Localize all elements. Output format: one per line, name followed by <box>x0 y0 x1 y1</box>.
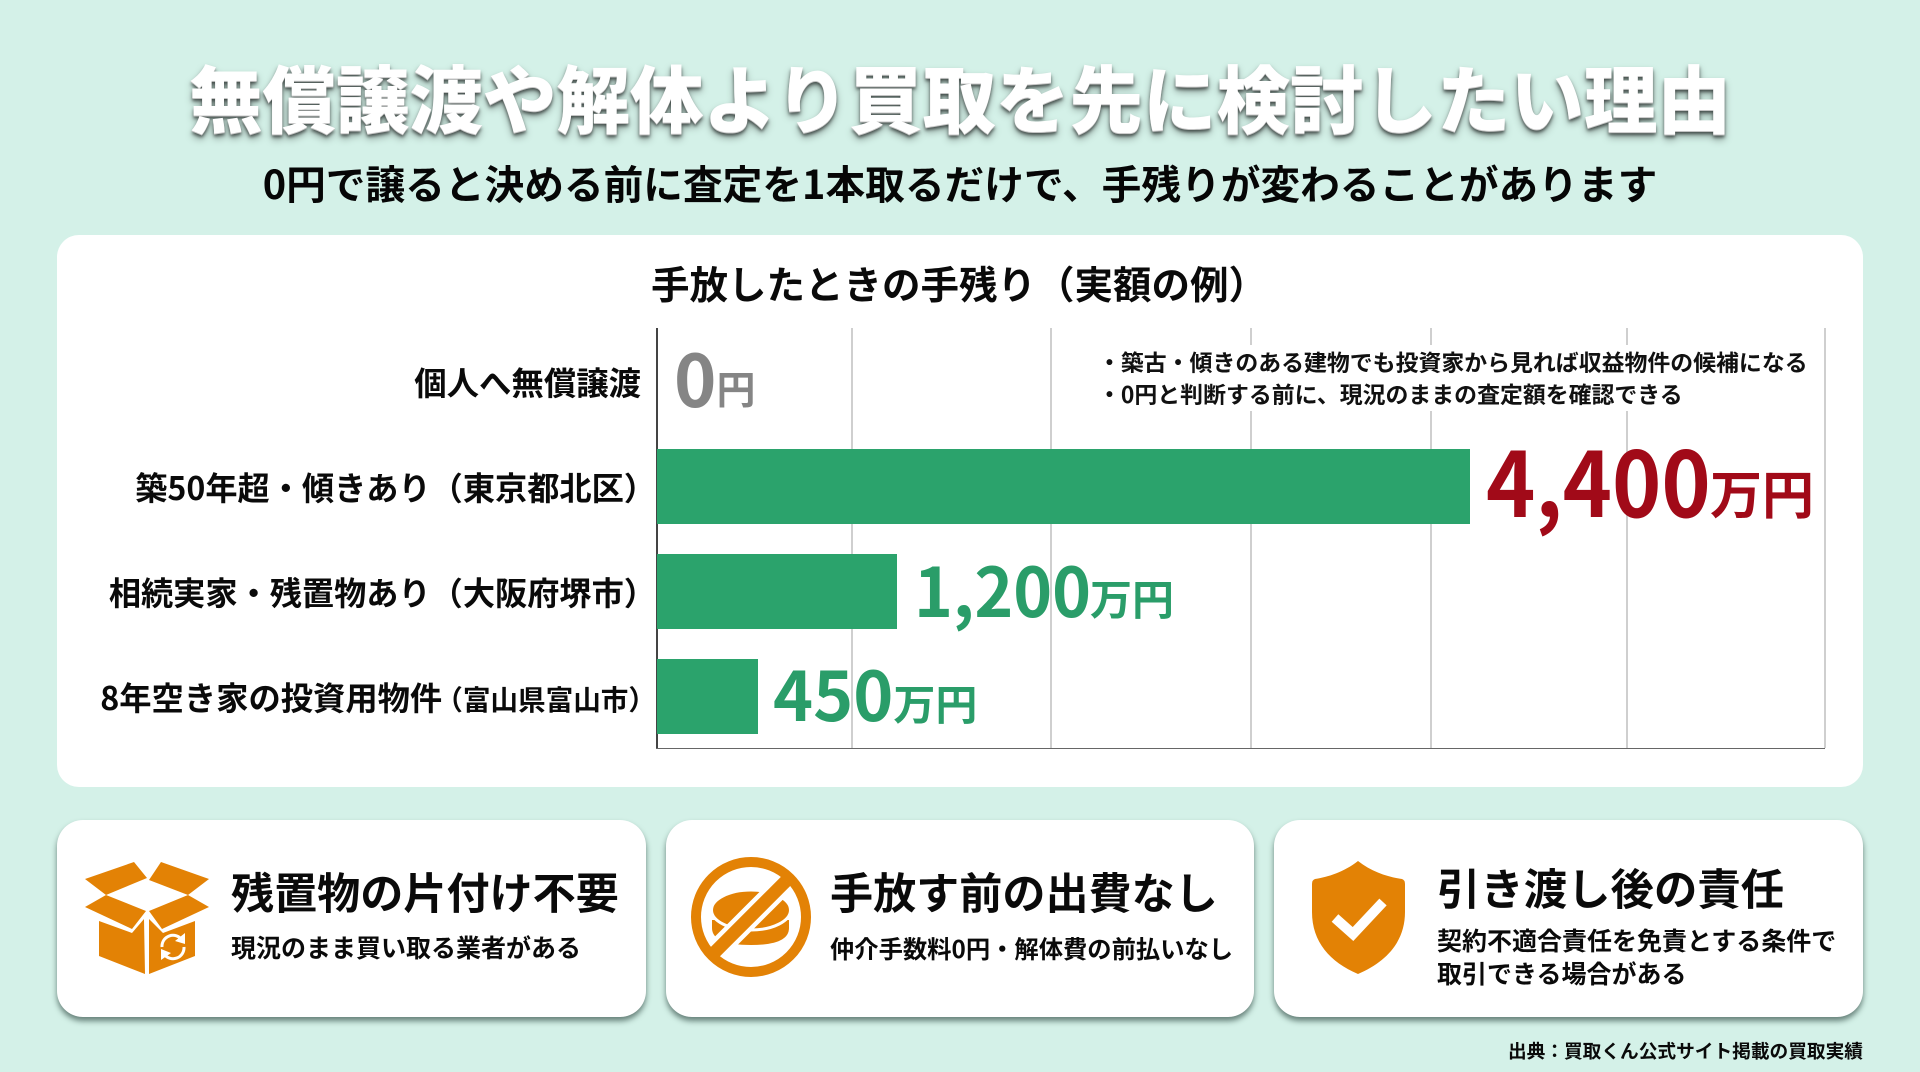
row label: 築50年超: 築50年超・傾きあり（東京都北区） <box>135 464 656 510</box>
chart title: 手放したときの手残り（実額の例） <box>651 255 1267 311</box>
bar: 1,200万円 <box>657 554 897 629</box>
card 3 text: 契約不適合責任を免責とする条件で <box>1437 922 1836 958</box>
card 3 title: 引き渡し後の責任 <box>1437 856 1784 918</box>
panel: chart <box>57 235 1863 787</box>
bullet notes: ・0円と判断する前に、現況のままの査定額を確認できる <box>1098 376 1683 410</box>
card: 残置物 <box>57 820 646 1017</box>
bar: 450万円 <box>657 659 758 734</box>
value: 4,400万円: 万円 <box>1710 454 1814 529</box>
bullet notes: ・築古・傾きのある建物でも投資家から見れば収益物件の候補になる <box>1098 344 1808 378</box>
row label: 個人へ無償譲渡: 個人へ無償譲渡 <box>414 358 641 405</box>
bullet notes <box>1098 345 1814 411</box>
card 2 text: 仲介手数料0円・解体費の前払いなし <box>830 930 1233 965</box>
bar: 4,400万円 <box>657 449 1470 524</box>
card 3 text <box>1437 922 1836 991</box>
subtitle: 0円で譲ると決める前に査定を1本取るだけで、手残りが変わることがあります <box>263 154 1657 211</box>
value: 450万円: 450万円 <box>773 642 977 741</box>
title: 無償譲渡や解体より買取を先に検討したい理由 <box>189 43 1731 149</box>
value: 4,400万円 <box>1486 413 1814 543</box>
row label: 8年空き家: 8年空き家の投資用物件（富山県富山市） <box>100 674 656 720</box>
card 2 title: 手放す前の出費なし <box>830 860 1218 922</box>
card: 責任 <box>1274 820 1863 1017</box>
card 3 text: 取引できる場合がある <box>1437 955 1687 991</box>
row label: 相続実家: 相続実家・残置物あり（大阪府堺市） <box>109 569 656 615</box>
card 1 text: 現況のまま買い取る業者がある <box>231 929 581 965</box>
value: 1,200万円: 1,200 <box>914 538 1091 637</box>
source note: 出典：買取くん公式サイト掲載の買取実績 <box>1508 1037 1863 1064</box>
value: 4,400万円: 4,400 <box>1486 413 1711 543</box>
card 1 title: 残置物の片付け不要 <box>231 860 619 922</box>
value: 1,200万円 <box>914 538 1174 637</box>
chart gridlines <box>656 328 1826 749</box>
value: 1,200万円: 万円 <box>1090 567 1174 628</box>
card: 出費なし <box>666 820 1254 1017</box>
value: 0円: 0円 <box>674 323 756 428</box>
